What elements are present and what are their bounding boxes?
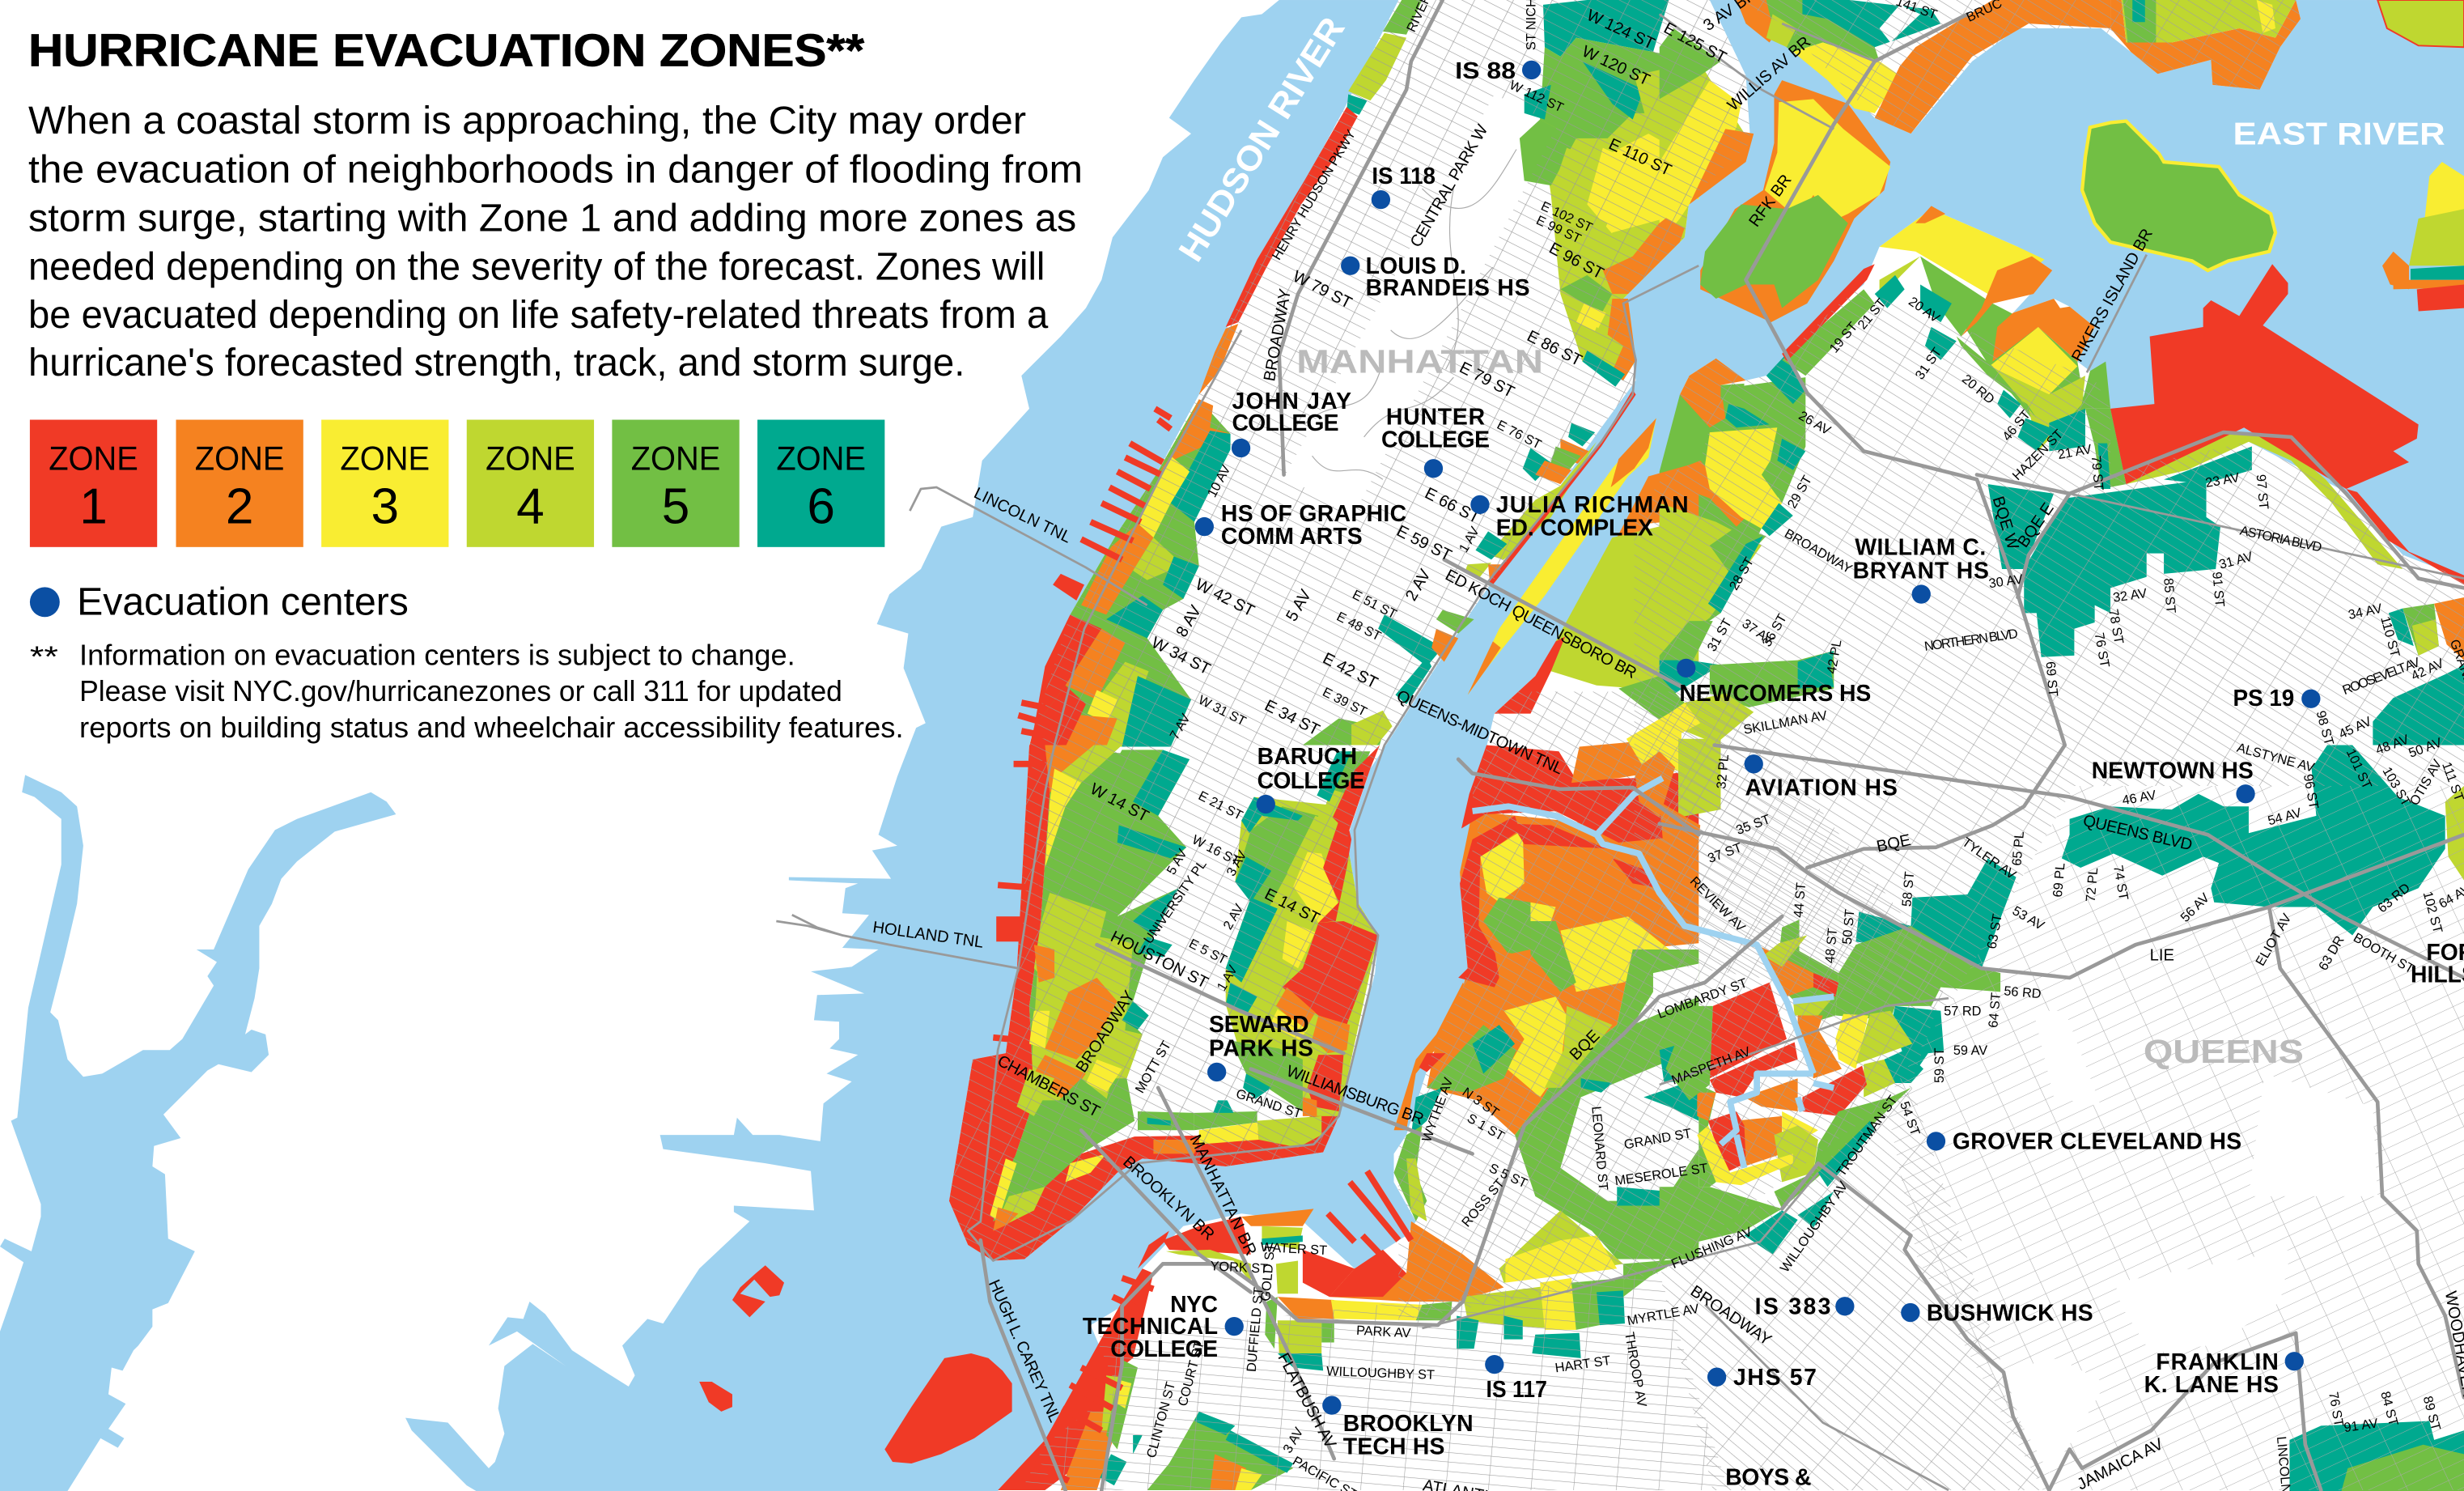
street labels: 101 ST bbox=[2343, 746, 2374, 792]
street labels: W 120 ST bbox=[1580, 43, 1652, 89]
street labels: RIKERS ISLAND BR bbox=[2068, 226, 2157, 365]
swatch: zone 5 bbox=[612, 420, 740, 547]
street labels: 19 ST bbox=[1826, 320, 1860, 356]
street labels: ROSS ST bbox=[1459, 1176, 1508, 1230]
center: IS 118 bbox=[1372, 164, 1436, 209]
street labels: E 76 ST bbox=[1495, 418, 1544, 452]
street labels: 32 PL bbox=[1714, 754, 1732, 789]
center: NYC Technical College: COLLEGE bbox=[1110, 1336, 1218, 1362]
center: JHS 57: JHS 57 bbox=[1733, 1365, 1817, 1391]
street labels: 2 AV bbox=[1220, 902, 1247, 932]
street labels: 48 ST bbox=[1822, 928, 1840, 964]
center: Brooklyn Tech HS bbox=[1322, 1395, 1474, 1459]
intro text block: the evacuation of neighborhoods in danger of flooding from bbox=[28, 147, 1083, 191]
center: NYC Technical College: NYC bbox=[1170, 1292, 1218, 1318]
piers bbox=[993, 409, 1411, 1480]
street labels: SKILLMAN AV bbox=[1742, 708, 1829, 737]
street labels: 97 ST bbox=[2254, 474, 2271, 510]
street labels: UNIVERSITY PL bbox=[1141, 857, 1210, 946]
street labels: 31 ST bbox=[1913, 345, 1944, 382]
zones: Brooklyn Heights and Red Hook bbox=[998, 1268, 1293, 1490]
center: Franklin K. Lane HS: K. LANE HS bbox=[2144, 1372, 2279, 1398]
street labels: 23 AV bbox=[2204, 470, 2241, 491]
swatch: zone 5: ZONE bbox=[631, 440, 720, 478]
swatch: zone 1 bbox=[30, 420, 157, 547]
street labels: WILLOUGHBY AV bbox=[1778, 1179, 1851, 1275]
street labels: PARK AV bbox=[1356, 1323, 1411, 1340]
zone: Roosevelt Island bbox=[1468, 418, 1656, 695]
street labels: E 96 ST bbox=[1546, 240, 1606, 282]
zones: Ellis, Liberty and Governors islands bbox=[699, 1265, 1012, 1463]
street labels: BQE bbox=[1567, 1027, 1603, 1064]
street labels: 72 PL bbox=[2084, 867, 2101, 903]
center: IS 117: IS 117 bbox=[1486, 1377, 1547, 1403]
street labels: 91 AV bbox=[2343, 1416, 2379, 1435]
street labels: 110 ST bbox=[2377, 615, 2403, 659]
street labels: 45 AV bbox=[2337, 714, 2374, 741]
label: Manhattan: MANHATTAN bbox=[1296, 342, 1543, 380]
street labels: ROOSEVELT AV bbox=[2340, 655, 2422, 698]
intro text block: storm surge, starting with Zone 1 and adding more zones as bbox=[28, 196, 1076, 240]
street labels: ALSTYNE AV bbox=[2235, 741, 2316, 775]
center: Franklin K. Lane HS: FRANKLIN bbox=[2156, 1349, 2279, 1375]
center: John Jay College: COLLEGE bbox=[1232, 410, 1339, 436]
street labels: HAZEN ST bbox=[2010, 427, 2066, 483]
street labels: 46 AV bbox=[2121, 788, 2157, 808]
street labels: MASPETH AV bbox=[1669, 1044, 1753, 1088]
street labels: FLUSHING AV bbox=[1669, 1225, 1754, 1272]
street labels: 53 AV bbox=[2010, 903, 2046, 933]
zone: LaGuardia Airport bbox=[2110, 264, 2419, 489]
street labels: 26 AV bbox=[1796, 408, 1833, 438]
center: IS 118: IS 118 bbox=[1372, 164, 1436, 189]
intro text block: be evacuated depending on life safety-related threats from a bbox=[28, 293, 1048, 337]
street labels: BQE E bbox=[2014, 499, 2058, 551]
street labels: 2 AV bbox=[1402, 566, 1435, 604]
center: Seward Park HS: SEWARD bbox=[1209, 1012, 1309, 1038]
street labels: HOUSTON ST bbox=[1108, 928, 1211, 992]
street labels: W 16 ST bbox=[1190, 832, 1242, 869]
center: PS 19: PS 19 bbox=[2233, 686, 2294, 712]
center: NYC Technical College bbox=[1083, 1292, 1244, 1362]
street labels: WATER ST bbox=[1260, 1240, 1328, 1258]
street labels: 31 ST bbox=[1705, 616, 1735, 654]
center: Newcomers HS bbox=[1677, 659, 1871, 707]
center: HS of Graphic Comm Arts: HS OF GRAPHIC bbox=[1221, 501, 1406, 527]
street labels: LIE bbox=[2150, 947, 2174, 965]
street labels: LOMBARDY ST bbox=[1656, 975, 1749, 1022]
street labels: 36 ST bbox=[1760, 611, 1790, 649]
street labels: COURT ST bbox=[1176, 1340, 1207, 1408]
street labels: FLATBUSH AV bbox=[1274, 1350, 1339, 1452]
street labels: E 99 ST bbox=[1534, 213, 1584, 246]
street labels: 1 AV bbox=[1457, 525, 1482, 555]
zones: Randalls and Wards islands bbox=[1700, 80, 1890, 322]
center: Aviation HS: AVIATION HS bbox=[1745, 775, 1898, 801]
center: HS of Graphic Comm Arts: COMM ARTS bbox=[1221, 524, 1363, 550]
street labels: 32 AV bbox=[2112, 586, 2148, 605]
street labels: 31 AV bbox=[2217, 550, 2254, 572]
zones: Astoria and Long Island City bbox=[1495, 206, 2464, 746]
footnote: reports on building status and wheelchair accessibility features. bbox=[79, 711, 904, 744]
center: William C. Bryant HS: BRYANT HS bbox=[1853, 559, 1989, 584]
center: Boys & Girls HS: BOYS & bbox=[1725, 1465, 1812, 1491]
street labels: 64 ST bbox=[1986, 992, 2004, 1028]
water and place labels bbox=[1172, 11, 2445, 1070]
center: Hunter College: HUNTER bbox=[1386, 404, 1485, 430]
Newark Bay and Kill Van Kull channel bbox=[0, 775, 396, 1491]
zones: Lower Manhattan bbox=[949, 746, 1380, 1260]
center: Newcomers HS: NEWCOMERS HS bbox=[1679, 681, 1871, 707]
zones: Queens Boulevard corridor bbox=[1660, 746, 2464, 1491]
street labels: W 112 ST bbox=[1508, 78, 1566, 116]
street labels: OTIS AV bbox=[2407, 757, 2445, 808]
street labels: CENTRAL PARK W bbox=[1407, 121, 1491, 250]
street labels: MOTT ST bbox=[1133, 1039, 1174, 1096]
street labels: 42 PL bbox=[1824, 639, 1845, 675]
street labels: 37 ST bbox=[1706, 840, 1744, 866]
center: Hunter College bbox=[1381, 404, 1490, 478]
street labels: BROADWAY bbox=[1687, 1282, 1775, 1349]
street labels: 78 ST bbox=[2106, 608, 2126, 645]
street labels: 21 ST bbox=[1855, 295, 1889, 332]
street labels: 57 RD bbox=[1944, 1005, 1981, 1019]
land: Bronx bbox=[1737, 0, 2301, 134]
street labels: E 14 ST bbox=[1262, 886, 1322, 928]
street labels: MANHATTAN BR bbox=[1186, 1132, 1260, 1259]
street labels: E 42 ST bbox=[1320, 649, 1380, 692]
street labels: 59 AV bbox=[1953, 1043, 1987, 1058]
street labels: 85 ST bbox=[2161, 577, 2178, 614]
center: HS of Graphic Comm Arts bbox=[1195, 501, 1406, 550]
major roads bbox=[776, 0, 2464, 1490]
street labels bbox=[872, 0, 2464, 1491]
street labels: 84 ST bbox=[2377, 1390, 2401, 1428]
street labels: HUGH L. CAREY TNL bbox=[985, 1277, 1063, 1425]
street labels: 54 AV bbox=[2267, 805, 2303, 828]
street labels: E 86 ST bbox=[1524, 327, 1584, 370]
center: Brooklyn Tech HS: BROOKLYN bbox=[1343, 1411, 1474, 1437]
intro text block bbox=[28, 99, 1083, 384]
intro text block: When a coastal storm is approaching, the City may order bbox=[28, 99, 1026, 142]
center: Newtown HS bbox=[2092, 758, 2255, 803]
swatch: zone 6: ZONE bbox=[776, 440, 866, 478]
street labels: S 5 ST bbox=[1486, 1161, 1529, 1191]
swatch: zone 2: 2 bbox=[226, 479, 253, 535]
street labels: 65 PL bbox=[2009, 830, 2027, 866]
street labels: 46 ST bbox=[2000, 407, 2034, 444]
street labels: W 14 ST bbox=[1087, 780, 1151, 826]
street labels: CHAMBERS ST bbox=[995, 1052, 1103, 1121]
center: Louis D. Brandeis HS: LOUIS D. bbox=[1366, 253, 1466, 279]
street labels: HENRY HUDSON PKWY bbox=[1270, 127, 1359, 262]
street labels: W 124 ST bbox=[1584, 6, 1657, 53]
zones: Upper East Side and Harlem bbox=[1303, 0, 1754, 746]
street labels: GRAND ST bbox=[1234, 1086, 1304, 1121]
street labels: 89 ST bbox=[2420, 1395, 2443, 1433]
street labels: GRAND ST bbox=[1623, 1126, 1693, 1153]
center: William C. Bryant HS: WILLIAM C. bbox=[1855, 535, 1986, 561]
center: NYC Technical College: TECHNICAL bbox=[1083, 1314, 1218, 1340]
title: HURRICANE EVACUATION ZONES** bbox=[28, 25, 864, 76]
street labels: W 34 ST bbox=[1148, 634, 1213, 678]
street labels: 63 DR bbox=[2316, 933, 2347, 973]
swatch: zone 6: 6 bbox=[807, 479, 835, 535]
street labels: S 1 ST bbox=[1465, 1111, 1507, 1144]
street labels: 8 AV bbox=[1173, 602, 1205, 640]
center: Julia Richman Ed. Complex: JULIA RICHMAN bbox=[1496, 492, 1689, 518]
street labels: 69 PL bbox=[2051, 862, 2068, 898]
street labels: ELIOT AV bbox=[2253, 911, 2294, 968]
swatch: zone 3 bbox=[321, 420, 448, 547]
street labels: 63 ST bbox=[1985, 913, 2005, 950]
center: Forest Hills HS bbox=[2411, 940, 2464, 988]
street labels: 56 RD bbox=[2004, 983, 2042, 1001]
street labels: 76 ST bbox=[2326, 1391, 2346, 1428]
street labels: 3 AV bbox=[1224, 848, 1250, 879]
center: Seward Park HS bbox=[1207, 1012, 1313, 1081]
street labels: 20 RD bbox=[1959, 372, 1997, 407]
street labels: TYLER AV bbox=[1959, 835, 2019, 882]
street labels: WILLIAMSBURG BR bbox=[1284, 1062, 1426, 1128]
label: Queens: QUEENS bbox=[2144, 1033, 2304, 1070]
swatch: zone 2: ZONE bbox=[195, 440, 284, 478]
street labels: THROOP AV bbox=[1622, 1331, 1649, 1408]
street labels: 69 ST bbox=[2042, 661, 2060, 697]
street labels: 96 ST bbox=[2301, 773, 2321, 810]
swatch: zone 1: ZONE bbox=[49, 440, 138, 478]
street labels: W 42 ST bbox=[1193, 576, 1257, 620]
street labels: E 21 ST bbox=[1196, 788, 1245, 823]
center: Louis D. Brandeis HS bbox=[1341, 253, 1530, 301]
street labels: RFK BR bbox=[1745, 172, 1796, 231]
center: Aviation HS bbox=[1745, 754, 1898, 801]
center: Julia Richman Ed. Complex bbox=[1470, 492, 1689, 541]
street labels: 74 ST bbox=[2110, 864, 2131, 902]
zones: Bronx bbox=[1737, 0, 2301, 134]
street labels: MYRTLE AV bbox=[1626, 1302, 1700, 1328]
label: Hudson River: HUDSON RIVER bbox=[1172, 11, 1352, 269]
street labels: N 3 ST bbox=[1460, 1085, 1502, 1120]
swatch: zone 2 bbox=[176, 420, 303, 547]
evacuation centers bbox=[1083, 58, 2464, 1491]
swatch: zone 4: 4 bbox=[516, 479, 545, 535]
center: John Jay College bbox=[1232, 389, 1351, 457]
label: East River: EAST RIVER bbox=[2233, 117, 2445, 152]
street labels: 7 AV bbox=[1167, 712, 1194, 742]
street labels: 34 AV bbox=[2347, 601, 2384, 622]
center: Julia Richman Ed. Complex: ED. COMPLEX bbox=[1496, 515, 1653, 541]
center: William C. Bryant HS bbox=[1853, 535, 1989, 604]
footnote: Information on evacuation centers is subject to change. bbox=[79, 638, 795, 671]
street labels: 102 ST bbox=[2420, 890, 2445, 935]
street labels: 50 AV bbox=[2407, 735, 2444, 761]
street labels: 21 AV bbox=[2057, 442, 2093, 462]
center: Brooklyn Tech HS: TECH HS bbox=[1343, 1434, 1444, 1459]
zone: Rikers Island bbox=[2082, 121, 2275, 270]
street labels: 35 ST bbox=[1734, 812, 1772, 838]
street labels: QUEENS BLVD bbox=[2081, 812, 2194, 854]
street labels: 63 RD bbox=[2375, 881, 2413, 915]
swatch: zone 4: ZONE bbox=[486, 440, 575, 478]
street labels: BQE W bbox=[1989, 495, 2021, 551]
footnote bbox=[30, 638, 904, 744]
street labels: W 31 ST bbox=[1196, 693, 1249, 729]
street labels: E 110 ST bbox=[1606, 135, 1674, 180]
street labels: 98 ST bbox=[2313, 709, 2336, 747]
street grids bbox=[949, 0, 2464, 1490]
street labels: 30 AV bbox=[1988, 572, 2024, 591]
zone underlays filling contiguous neighborhoods bbox=[993, 62, 2085, 1221]
street labels: HOLLAND TNL bbox=[872, 919, 985, 952]
street labels: E 125 ST bbox=[1660, 19, 1729, 67]
legend: evacuation centers: Evacuation centers bbox=[77, 580, 409, 623]
center: Baruch College: BARUCH bbox=[1257, 744, 1357, 770]
swatch: zone 3: ZONE bbox=[340, 440, 430, 478]
center: Bushwick HS: BUSHWICK HS bbox=[1927, 1300, 2093, 1326]
center: IS 88: IS 88 bbox=[1455, 58, 1516, 84]
street labels: GOLD ST bbox=[1258, 1242, 1278, 1302]
street labels: HART ST bbox=[1554, 1353, 1612, 1375]
street labels: WILLIS AV BR bbox=[1724, 33, 1814, 115]
street labels: E 48 ST bbox=[1334, 610, 1384, 644]
street labels: E 102 ST bbox=[1538, 199, 1595, 236]
land: Queens and Brooklyn bbox=[998, 209, 2464, 1491]
street labels: TROUTMAN ST bbox=[1834, 1093, 1901, 1179]
center: Franklin K. Lane HS bbox=[2144, 1349, 2304, 1398]
street labels: BROADWAY bbox=[1261, 287, 1295, 383]
swatch: zone 6 bbox=[757, 420, 884, 547]
street labels: 54 ST bbox=[1897, 1099, 1923, 1138]
street labels: CLINTON ST bbox=[1144, 1380, 1178, 1459]
street labels: 103 ST bbox=[2380, 765, 2413, 809]
street labels: LINCOLN TNL bbox=[971, 484, 1074, 547]
intro text block: needed depending on the severity of the forecast. Zones will bbox=[28, 245, 1045, 289]
center: Louis D. Brandeis HS: BRANDEIS HS bbox=[1366, 275, 1530, 301]
street labels: 1 AV bbox=[1215, 963, 1240, 993]
street labels: REVIEW AV bbox=[1687, 874, 1748, 935]
swatch: zone 5: 5 bbox=[662, 479, 689, 535]
street labels: 3 AV bbox=[1280, 1425, 1306, 1455]
swatch: zone 1: 1 bbox=[79, 479, 108, 535]
footnote: Please visit NYC.gov/hurricanezones or call 311 for updated bbox=[79, 674, 842, 707]
center: IS 383: IS 383 bbox=[1755, 1294, 1830, 1320]
center: Baruch College bbox=[1257, 744, 1365, 813]
street labels: W 79 ST bbox=[1290, 268, 1355, 312]
street labels: 28 ST bbox=[1727, 555, 1757, 593]
zones: College Point and Whitestone bbox=[2377, 0, 2464, 312]
center: Newtown HS: NEWTOWN HS bbox=[2092, 758, 2254, 784]
street labels: ED KOCH QUEENSBORO BR bbox=[1442, 567, 1639, 682]
center: IS 88 bbox=[1455, 58, 1541, 84]
street labels: E 39 ST bbox=[1320, 685, 1369, 720]
street labels: BROOKLYN BR bbox=[1119, 1153, 1218, 1244]
zones: Greenpoint, Williamsburg, Maspeth bbox=[1138, 706, 1720, 1370]
street labels: 56 AV bbox=[2178, 890, 2212, 925]
center: Seward Park HS: PARK HS bbox=[1209, 1036, 1313, 1062]
Newtown Creek and branches bbox=[1473, 778, 1834, 1168]
street labels: 48 AV bbox=[2373, 733, 2411, 758]
swatch: zone 4 bbox=[467, 420, 594, 547]
street labels: WYTHE AV bbox=[1419, 1076, 1456, 1144]
street labels: QUEENS-MIDTOWN TNL bbox=[1393, 687, 1566, 778]
street labels: 44 ST bbox=[1791, 882, 1809, 918]
street labels: 37 AV bbox=[1739, 616, 1775, 648]
footnote: ** bbox=[30, 639, 58, 673]
street labels: 91 ST bbox=[2209, 571, 2227, 608]
street labels: E 34 ST bbox=[1262, 697, 1322, 739]
street labels: 29 ST bbox=[1785, 474, 1815, 511]
street labels: NORTHERN BLVD bbox=[1923, 627, 2019, 654]
center: Hunter College: COLLEGE bbox=[1381, 427, 1490, 453]
street labels: E 5 ST bbox=[1186, 937, 1229, 967]
intro text block: hurricane's forecasted strength, track, and storm surge. bbox=[28, 341, 965, 384]
street labels: E 59 ST bbox=[1393, 522, 1454, 565]
New Jersey land bbox=[0, 0, 1279, 1491]
street labels: 5 AV bbox=[1283, 586, 1315, 625]
street labels: 58 ST bbox=[1899, 871, 1917, 907]
street labels: 76 ST bbox=[2092, 631, 2112, 669]
legend: zone swatches bbox=[30, 420, 884, 547]
center: Baruch College: COLLEGE bbox=[1257, 768, 1365, 794]
zones: Manhattan west side and uptown bbox=[1029, 0, 1422, 746]
center: Grover Cleveland HS: GROVER CLEVELAND HS bbox=[1953, 1129, 2241, 1155]
street labels: YORK ST bbox=[1210, 1259, 1269, 1276]
street labels: E 51 ST bbox=[1350, 587, 1399, 622]
street labels: MESEROLE ST bbox=[1614, 1161, 1709, 1188]
street labels: 79 ST bbox=[2089, 455, 2106, 491]
street labels: LEONARD ST bbox=[1588, 1106, 1610, 1191]
street labels: 10 AV bbox=[1205, 463, 1234, 500]
street labels: BROADWAY bbox=[1073, 988, 1139, 1076]
street labels: 5 AV bbox=[1164, 847, 1190, 877]
street labels: WILLOUGHBY ST bbox=[1326, 1364, 1435, 1383]
street labels: ASTORIA BLVD bbox=[2238, 524, 2323, 555]
street labels: BOOTH ST bbox=[2351, 930, 2416, 976]
swatch: zone 3: 3 bbox=[371, 479, 399, 535]
street labels: 20 AV bbox=[1906, 294, 1942, 325]
street labels: BQE bbox=[1875, 831, 1912, 856]
center: John Jay College: JOHN JAY bbox=[1232, 389, 1351, 414]
street labels: 59 ST bbox=[1932, 1048, 1947, 1083]
street labels: 50 ST bbox=[1840, 909, 1857, 945]
street labels: E 79 ST bbox=[1457, 359, 1517, 401]
street labels: 42 AV bbox=[2409, 656, 2446, 684]
land: Manhattan bbox=[949, 0, 1750, 1260]
center: IS 117 bbox=[1485, 1355, 1547, 1403]
street labels: DUFFIELD ST bbox=[1245, 1286, 1266, 1373]
street labels: BROADWAY bbox=[1782, 526, 1855, 576]
street labels: E 66 ST bbox=[1422, 485, 1482, 527]
